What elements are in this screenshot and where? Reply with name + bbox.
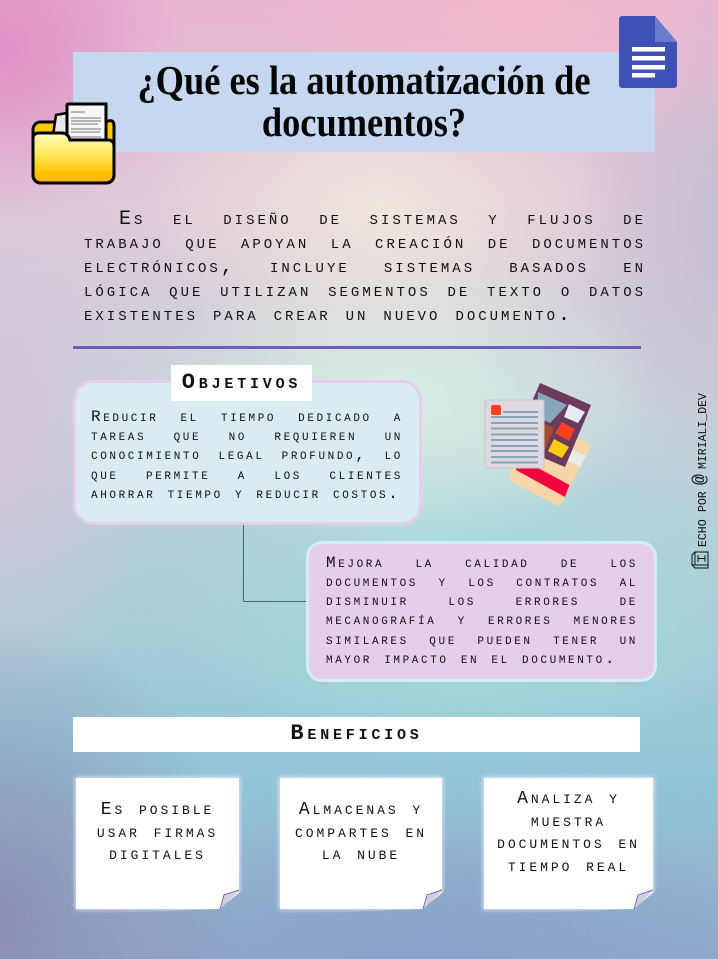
card: almacenar en la nube: la nube bbox=[322, 845, 400, 865]
heading: Objetivos bbox=[171, 365, 312, 401]
card: firmas digitales: digitales bbox=[109, 845, 206, 865]
intro paragraph: electrónicos, incluye sistemas basados en bbox=[84, 256, 646, 279]
title banner: documentos? bbox=[262, 99, 466, 145]
panel: objective 2: documentos y los contratos al bbox=[326, 573, 638, 591]
intro paragraph: trabajo que apoyan la creación de documentos bbox=[84, 232, 646, 255]
credit: vertical signature: ECHO bbox=[697, 519, 710, 547]
card: almacenar en la nube bbox=[276, 774, 446, 912]
panel: objective 1: Reducir el tiempo dedicado a bbox=[91, 408, 403, 426]
icon: yellow folder with documents bbox=[32, 102, 116, 184]
panel: objective 1: tareas que no requieren un bbox=[91, 427, 403, 445]
intro paragraph bbox=[84, 208, 646, 327]
heading: Beneficios: Beneficios bbox=[290, 721, 423, 746]
icon: documents illustration bbox=[484, 383, 591, 505]
credit: vertical signature: @ bbox=[691, 474, 711, 485]
credit: vertical signature: MIRIALI_DEV bbox=[697, 393, 710, 469]
card: firmas digitales bbox=[72, 774, 242, 912]
panel: objective 2: similares que pueden tener un bbox=[326, 631, 638, 649]
title banner: ¿Qué es la automatización de bbox=[137, 57, 591, 103]
card: análisis en tiempo real: documentos en bbox=[497, 834, 640, 854]
panel: objective 2: mecanografía y errores menores bbox=[326, 611, 638, 629]
card: almacenar en la nube: compartes en bbox=[295, 822, 427, 842]
panel: objective 2: disminuir los errores de bbox=[326, 592, 638, 610]
icon: document sheet bbox=[619, 16, 677, 88]
divider bbox=[73, 346, 641, 348]
panel: objective 1 bbox=[73, 380, 422, 525]
intro paragraph: existentes para crear un nuevo documento. bbox=[84, 304, 573, 327]
card: análisis en tiempo real: tiempo real bbox=[508, 856, 629, 876]
intro paragraph: Es el diseño de sistemas y flujos de bbox=[119, 208, 646, 231]
panel: objective 1: conocimiento legal profundo, lo bbox=[91, 446, 403, 464]
card: análisis en tiempo real bbox=[480, 774, 656, 912]
panel: objective 2 bbox=[306, 541, 657, 682]
intro paragraph: lógica que utilizan segmentos de texto o datos bbox=[84, 280, 646, 303]
title banner bbox=[73, 52, 655, 152]
card: firmas digitales: Es posible bbox=[101, 800, 214, 820]
card: firmas digitales: usar firmas bbox=[97, 822, 218, 842]
heading: Objetivos: Objetivos bbox=[182, 370, 301, 395]
credit: vertical signature bbox=[691, 393, 711, 568]
card: análisis en tiempo real: Analiza y bbox=[517, 789, 620, 809]
panel: objective 1: que permite a los clientes bbox=[91, 466, 403, 484]
card: almacenar en la nube: Almacenas y bbox=[299, 800, 423, 820]
panel: objective 2: Mejora la calidad de los bbox=[326, 554, 638, 572]
card: análisis en tiempo real: muestra bbox=[531, 812, 606, 832]
heading: Beneficios bbox=[73, 717, 640, 752]
connector between objective boxes bbox=[243, 525, 306, 602]
credit: vertical signature: POR bbox=[697, 491, 710, 512]
panel: objective 2: mayor impacto en el documento. bbox=[326, 650, 617, 668]
panel: objective 1: ahorrar tiempo y reducir costos. bbox=[91, 485, 400, 503]
